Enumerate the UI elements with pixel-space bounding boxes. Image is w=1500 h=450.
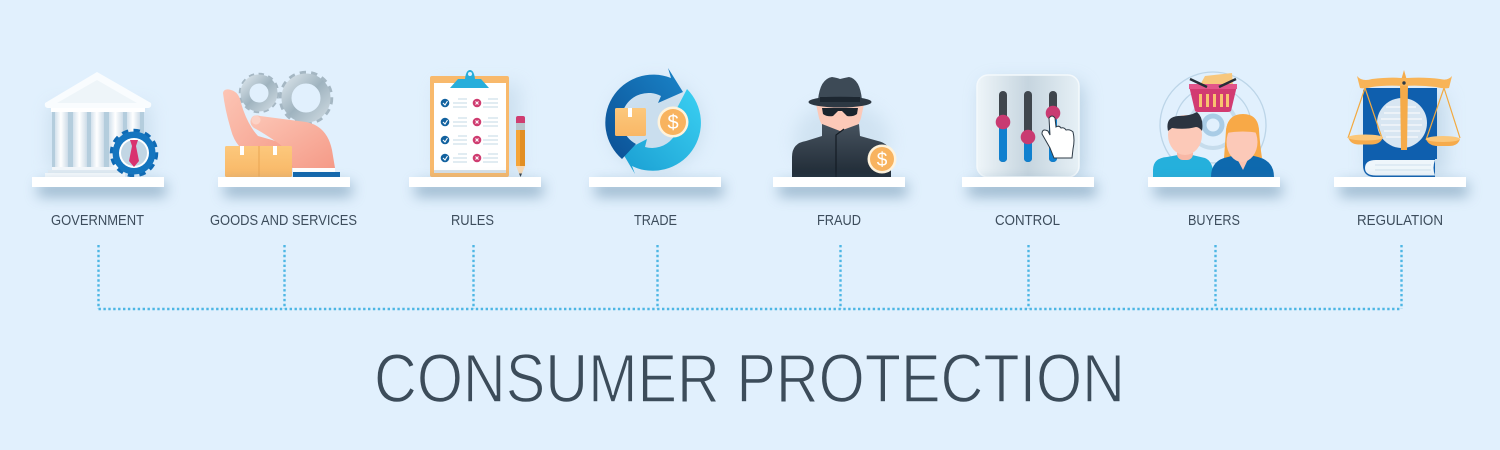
label: goods and services: GOODS AND SERVICES bbox=[210, 213, 357, 229]
icon: circular arrows with box and coin bbox=[605, 68, 702, 174]
item: control bbox=[962, 75, 1096, 229]
shelf: trade bbox=[589, 177, 723, 196]
label: control: CONTROL bbox=[995, 213, 1060, 229]
label: buyers: BUYERS bbox=[1188, 213, 1240, 229]
icon: government building with gear and tie bbox=[45, 72, 156, 177]
icon: clipboard checklist and pencil bbox=[430, 70, 525, 177]
shelf: control bbox=[962, 177, 1096, 196]
shelf: rules bbox=[409, 177, 543, 196]
icon: slider panel with pointer hand bbox=[977, 75, 1084, 180]
label: rules: RULES bbox=[451, 213, 494, 229]
label: regulation: REGULATION bbox=[1357, 213, 1443, 229]
label: trade: TRADE bbox=[634, 213, 677, 229]
shelf: government bbox=[32, 177, 166, 196]
shelf: goods and services bbox=[218, 177, 352, 196]
icon: hooded spy with coin: $ bbox=[877, 150, 888, 171]
icon: two buyers with shopping basket bbox=[1153, 72, 1274, 178]
icon: circular arrows with box and coin: $ bbox=[667, 112, 679, 134]
shelf: buyers bbox=[1148, 177, 1282, 196]
item: regulation bbox=[1334, 70, 1468, 229]
item: buyers bbox=[1148, 72, 1282, 229]
dotted connector bbox=[98, 245, 1402, 309]
item: government bbox=[32, 72, 166, 229]
icon: law book with scales bbox=[1348, 70, 1460, 177]
item: goods and services bbox=[210, 72, 357, 229]
shelf: regulation bbox=[1334, 177, 1468, 196]
label: fraud: FRAUD bbox=[817, 213, 861, 229]
icon: hooded spy with coin bbox=[792, 77, 896, 178]
item: trade bbox=[589, 68, 723, 229]
label: government: GOVERNMENT bbox=[51, 213, 144, 229]
item: rules bbox=[409, 70, 543, 229]
shelf: fraud bbox=[773, 177, 907, 196]
icon: hand with gears and boxes bbox=[223, 72, 340, 177]
title: CONSUMER PROTECTION bbox=[374, 340, 1125, 417]
item: fraud bbox=[773, 77, 907, 229]
